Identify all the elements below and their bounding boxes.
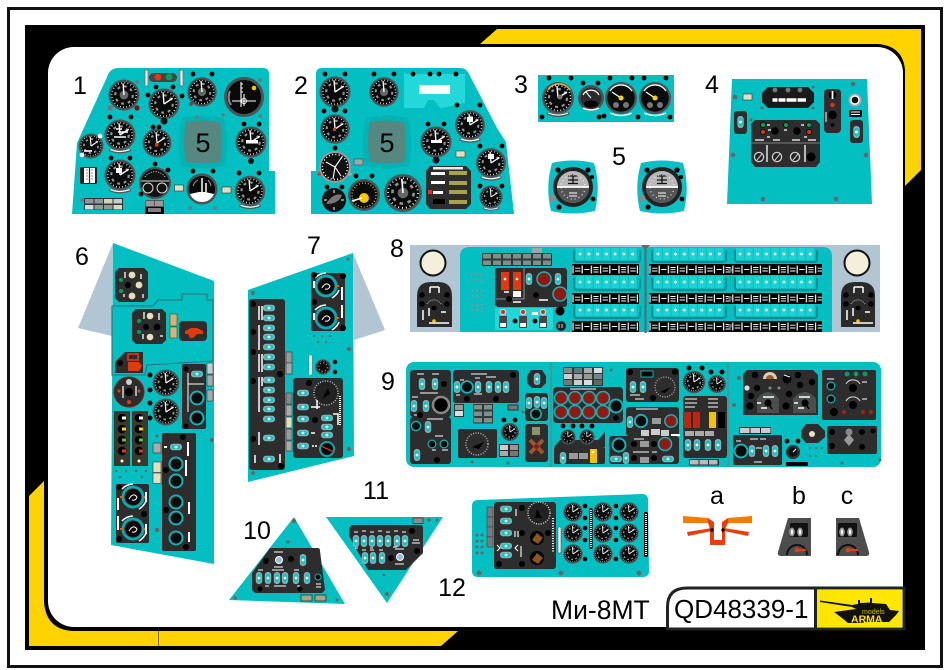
bottom strip — [689, 459, 719, 466]
numbered labels: 7 — [307, 232, 321, 260]
numbered labels: 1 — [73, 72, 87, 100]
switch plate — [495, 268, 567, 307]
panel 11 — [326, 517, 443, 603]
numbered labels: 2 — [294, 72, 308, 100]
side gauges — [148, 370, 179, 425]
grey switches — [207, 363, 213, 401]
screws — [470, 368, 882, 464]
lower plates — [554, 424, 605, 464]
holes and screws — [322, 72, 504, 189]
cream switches — [153, 443, 161, 484]
coloured switch plate — [683, 396, 727, 458]
numbered labels: 4 — [705, 71, 719, 99]
warning lights — [145, 70, 183, 86]
side buttons — [286, 352, 292, 451]
lower ring plate — [609, 436, 679, 464]
compass dial — [322, 188, 346, 212]
lamp plate top — [115, 268, 148, 302]
gauges — [79, 77, 267, 208]
panel 6 — [78, 243, 214, 564]
blue grey flap — [353, 253, 385, 340]
numbered labels: 12 — [438, 574, 466, 602]
black knobs — [556, 306, 566, 331]
panel 8 — [410, 245, 880, 333]
numbered labels: 9 — [381, 368, 395, 396]
tan switches — [170, 314, 177, 338]
window 5: 5 — [195, 128, 211, 158]
numbered labels: 3 — [514, 71, 528, 99]
numbered labels: 5 — [612, 143, 626, 171]
big attitude gauge — [224, 77, 264, 117]
lighter placard — [404, 74, 465, 108]
logo: models — [862, 609, 885, 616]
panel 12 — [472, 494, 649, 577]
knobs — [785, 424, 825, 466]
clock — [317, 151, 352, 183]
numbered labels: c — [841, 482, 853, 510]
black strips — [553, 508, 648, 557]
product code tab — [668, 587, 904, 629]
screws — [233, 519, 338, 602]
bottom centre plate — [733, 427, 782, 465]
tank silhouette — [820, 598, 899, 623]
red ring plate — [553, 387, 623, 423]
panel 10 — [229, 517, 345, 604]
olive lamp plates — [114, 411, 148, 466]
button block — [84, 198, 123, 210]
screws — [731, 82, 868, 201]
cream labels — [174, 185, 231, 193]
blue grey flap — [78, 243, 113, 336]
product code tab: QD48339-1 — [674, 594, 808, 624]
olive buttons — [301, 595, 326, 601]
lower selector — [145, 200, 164, 214]
part c — [836, 518, 869, 556]
screws — [251, 258, 351, 475]
grey background — [410, 245, 880, 332]
screws — [476, 534, 641, 575]
lamp and switch — [848, 94, 863, 143]
centre post — [641, 245, 732, 333]
dial plate — [458, 418, 519, 458]
black label strips — [572, 264, 822, 332]
yellow centre gauge — [348, 179, 380, 211]
engine gauge — [139, 167, 171, 199]
cyan body — [460, 247, 832, 332]
holes and screws — [108, 72, 261, 196]
red handle plate — [179, 321, 207, 341]
numbered labels: b — [792, 482, 806, 510]
altimeter dial — [186, 174, 218, 204]
small label — [743, 94, 752, 100]
gauges — [319, 76, 506, 212]
numbered labels: a — [710, 482, 724, 510]
model name: Ми-8МТ — [551, 595, 650, 625]
knob plate — [311, 272, 346, 331]
numbered labels — [73, 71, 853, 602]
terminal rows — [574, 248, 817, 318]
dark plate — [494, 502, 556, 569]
switch plate — [349, 525, 423, 570]
panel 9 — [406, 362, 882, 467]
part b — [778, 518, 811, 556]
part a — [683, 516, 752, 545]
black pill display — [762, 87, 814, 108]
panel 2 — [311, 68, 514, 214]
annunciator plate — [426, 166, 471, 209]
ring plate — [162, 433, 196, 551]
right lower plate — [827, 426, 877, 454]
light toggle strip — [495, 308, 553, 330]
dial plate — [293, 378, 343, 458]
switch block — [80, 167, 97, 184]
left lamp — [420, 250, 446, 276]
wide switch plate — [453, 370, 519, 403]
panel body — [111, 243, 214, 564]
outlined section — [112, 294, 213, 375]
screws — [115, 434, 214, 532]
button grid — [482, 248, 552, 266]
red bezel dial — [114, 377, 144, 407]
button groups — [454, 404, 519, 457]
left plate — [417, 282, 452, 327]
labels — [354, 151, 465, 165]
panel 5 gauges — [548, 160, 687, 214]
panel 4 — [727, 79, 872, 204]
left plate — [410, 370, 451, 464]
switch plate — [252, 548, 325, 593]
logo — [817, 590, 902, 627]
numbered labels: 6 — [75, 243, 89, 271]
window 5 — [179, 116, 227, 168]
toggle plate — [824, 89, 841, 133]
panel 1 — [72, 68, 275, 214]
knob plate — [116, 484, 149, 543]
right upper plate — [822, 370, 876, 420]
logo: ARMA — [851, 614, 883, 626]
lamp plate middle — [132, 309, 166, 344]
long switch plate — [249, 299, 285, 470]
numbered labels: 11 — [363, 477, 389, 505]
gauge matrix — [563, 502, 639, 564]
top button grid — [563, 367, 603, 386]
small gauge — [309, 355, 337, 375]
window 5: 5 — [379, 128, 395, 158]
numbered labels: 8 — [390, 235, 404, 263]
central control plate — [751, 120, 820, 167]
left switch — [734, 111, 747, 134]
dot blocks — [470, 273, 483, 311]
right plate — [841, 282, 875, 327]
screws — [383, 518, 438, 596]
upper dial plate — [626, 368, 679, 402]
switch plate E — [182, 364, 206, 429]
holes — [540, 76, 672, 119]
numbered labels: 10 — [243, 517, 271, 545]
middle ring plate — [626, 407, 680, 436]
two gauges — [683, 366, 726, 393]
grey strip — [487, 507, 493, 547]
panel 7 — [248, 253, 385, 482]
right big plate — [743, 370, 818, 415]
right lamp — [844, 250, 870, 276]
holes — [583, 504, 618, 561]
red switch plate — [115, 352, 143, 373]
gauge row — [542, 82, 671, 116]
panel 3 — [538, 75, 674, 122]
panel body — [248, 253, 354, 482]
window 5 — [363, 116, 411, 168]
column plates — [525, 370, 548, 462]
grey tab — [413, 518, 423, 524]
